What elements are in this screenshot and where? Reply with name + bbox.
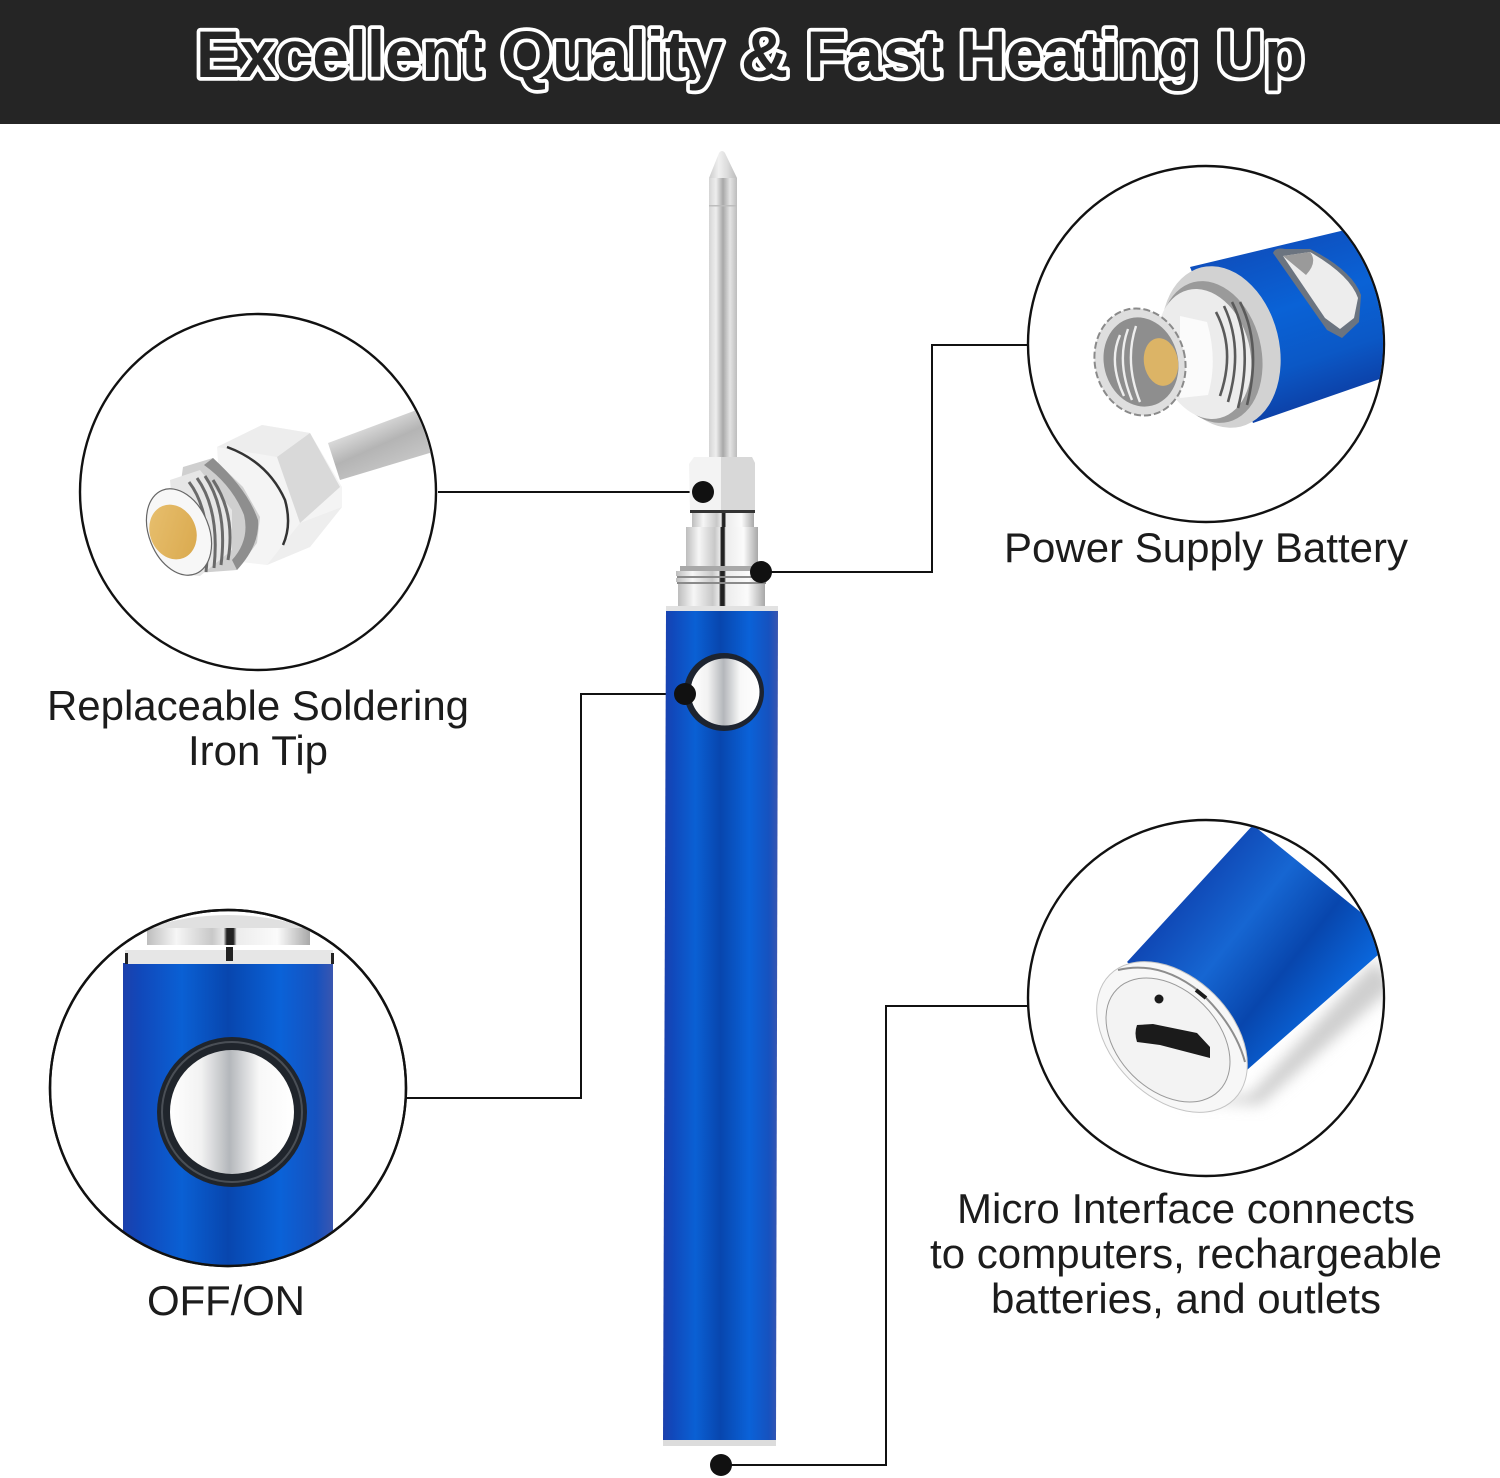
label: replaceable tip: Replaceable Soldering [47,682,469,729]
label: replaceable tip: Iron Tip [188,727,328,774]
pen body [663,611,778,1440]
label: off/on: OFF/ON [147,1277,305,1324]
connector: switch circle to pen button [406,694,685,1098]
label: micro interface: batteries, and outlets [991,1275,1381,1322]
label: micro interface: Micro Interface connects [957,1185,1415,1232]
usb port [1136,1024,1210,1058]
photo: soldering tip close-up [146,410,430,576]
panel: off/on switch [50,910,406,1283]
anchor dot: base [710,1454,732,1476]
panel: battery head [1028,166,1400,522]
label: power supply battery: Power Supply Battery [1004,524,1408,571]
connector: micro interface circle to pen base [721,1006,1028,1465]
chrome collars [676,513,767,606]
panel: micro interface [1028,820,1395,1176]
label: micro interface: to computers, rechargeable [930,1230,1442,1277]
title banner [0,0,1500,124]
photo: micro interface close-up [1096,826,1383,1113]
button [1273,248,1361,338]
connector: battery circle to pen thread [761,345,1028,572]
pen base ring [663,1440,776,1446]
hex nut [689,457,755,513]
anchor dot: button [674,683,696,705]
connector: tip circle to pen nut [438,491,703,493]
power button [684,653,764,731]
photo: switch close-up [123,915,334,1283]
photo: battery head close-up [1093,230,1383,428]
iron tip shaft [709,151,737,457]
pen flange [666,606,778,612]
anchor dot: tip [692,481,714,503]
soldering iron pen [663,151,778,1446]
anchor dot: battery [750,561,772,583]
switch button [157,1037,307,1187]
title: Excellent Quality & Fast Heating Up [196,17,1304,91]
end cap [1096,961,1248,1113]
panel: replaceable tip [80,314,446,670]
